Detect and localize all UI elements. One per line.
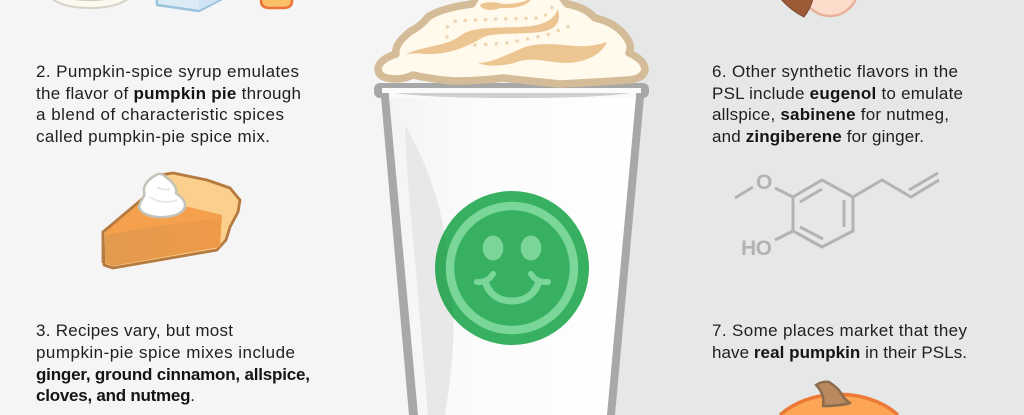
cup rim — [374, 83, 649, 98]
icon: orange syrup bottle (cropped) — [261, 0, 292, 8]
text block: step 2: a blend of characteristic spices — [36, 105, 284, 124]
text block: step 2: the flavor of pumpkin pie through — [36, 84, 301, 103]
text block: step 6 — [712, 62, 963, 146]
cup right wall — [607, 97, 644, 415]
cup — [374, 83, 649, 415]
text block: step 3: pumpkin-pie spice mixes include — [36, 343, 295, 362]
text block: step 3 — [36, 321, 310, 405]
text block: step 3: cloves, and nutmeg. — [36, 386, 195, 405]
smiley eyes — [483, 236, 541, 260]
smiley mouth — [477, 274, 548, 301]
text block: step 6: allspice, sabinene for nutmeg, — [712, 105, 949, 124]
swirl: middle — [405, 9, 559, 55]
icon: pumpkin — [780, 382, 898, 415]
text block: step 3: ginger, ground cinnamon, allspice, — [36, 365, 310, 384]
swirl: lower — [478, 42, 607, 66]
text block: step 6: 6. Other synthetic flavors in the — [712, 62, 958, 81]
cup highlight — [405, 125, 454, 415]
text block: step 2: called pumpkin-pie spice mix. — [36, 127, 270, 146]
icon: milk carton (cropped) — [157, 0, 222, 11]
text block: step 6: PSL include eugenol to emulate — [712, 84, 963, 103]
dotted lines — [447, 3, 554, 37]
text block: step 7: have real pumpkin in their PSLs. — [712, 343, 967, 362]
badge: green smiley — [435, 191, 589, 345]
text block: step 2: 2. Pumpkin-spice syrup emulates — [36, 62, 299, 81]
text block: step 7 — [712, 321, 968, 362]
molecule: eugenol — [735, 171, 939, 260]
cup body — [385, 97, 640, 415]
icon: nutmeg (cropped) — [780, 0, 858, 17]
text block: step 7: 7. Some places market that they — [712, 321, 968, 340]
molecule: eugenol: HO — [741, 237, 772, 260]
text block: step 2 — [36, 62, 301, 146]
badge ring — [450, 206, 574, 330]
icon: pumpkin pie slice — [103, 173, 240, 268]
text block: step 6: and zingiberene for ginger. — [712, 127, 924, 146]
icon: plate (cropped) — [50, 0, 130, 8]
whipped cream — [378, 0, 645, 84]
cup left wall — [381, 97, 418, 415]
molecule: eugenol: O — [756, 171, 772, 194]
text block: step 3: 3. Recipes vary, but most — [36, 321, 233, 340]
swirl: top — [480, 0, 532, 10]
